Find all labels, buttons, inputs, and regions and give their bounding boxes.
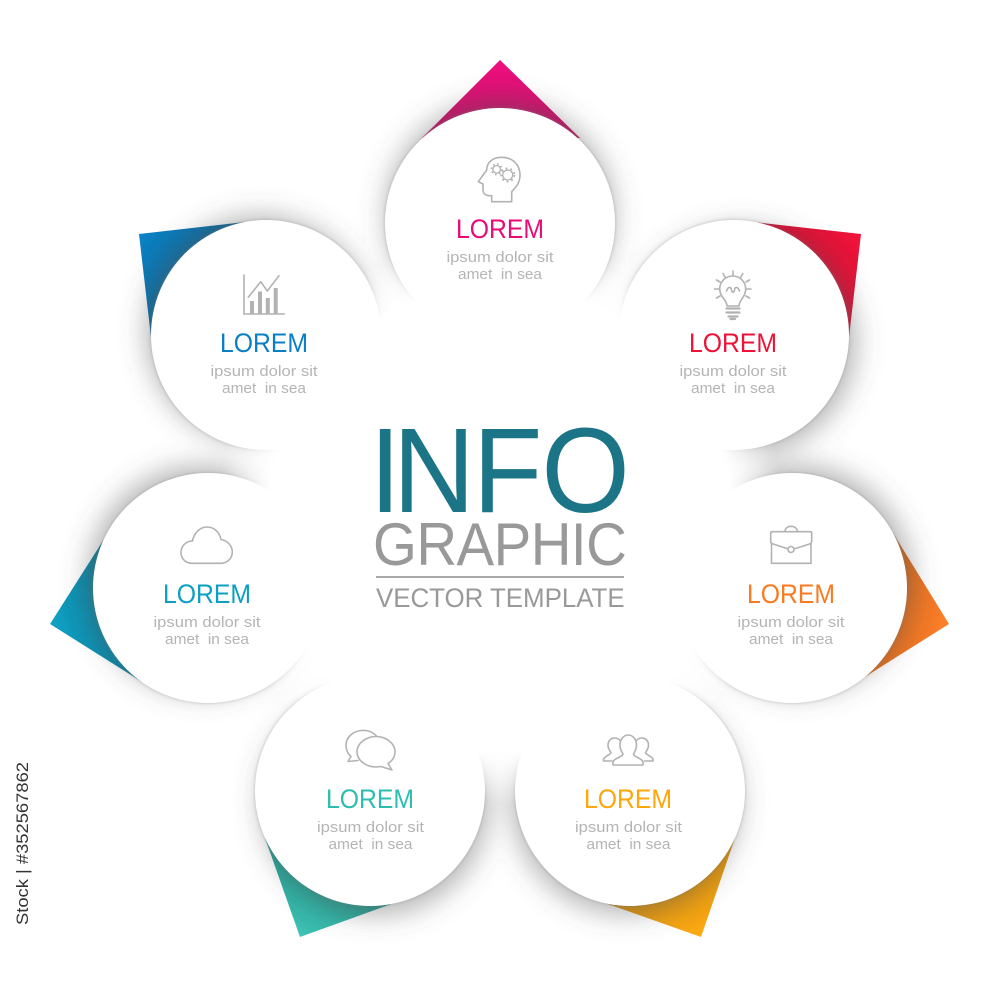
description: ipsum dolor sit [446, 249, 554, 266]
panel: upper right step [680, 271, 787, 397]
title rule [376, 576, 624, 578]
white circles [93, 108, 907, 906]
heading: LOREM [326, 784, 414, 814]
description: ipsum dolor sit [317, 819, 425, 836]
title [369, 403, 630, 613]
description: amet in sea [328, 836, 413, 853]
description: amet in sea [165, 631, 250, 648]
description: amet in sea [749, 631, 834, 648]
icon: group of people [604, 735, 653, 765]
panel: lower right step [575, 735, 683, 853]
icon: head with gears [478, 157, 520, 202]
description: ipsum dolor sit [680, 363, 787, 380]
heading: LOREM [456, 214, 544, 244]
description: amet in sea [458, 266, 543, 283]
icon: cloud [181, 527, 232, 563]
icon: speech bubbles [346, 730, 395, 770]
icon: briefcase [771, 526, 812, 563]
heading: LOREM [747, 579, 835, 609]
heading: LOREM [163, 579, 251, 609]
description: ipsum dolor sit [154, 614, 261, 631]
heading: LOREM [584, 784, 672, 814]
coloured ribbon corners behind the circles [50, 60, 949, 937]
description: ipsum dolor sit [210, 363, 318, 380]
icon: light bulb [714, 271, 751, 319]
white central area merging the circles [268, 288, 732, 752]
description: amet in sea [586, 836, 671, 853]
stock number, rotated along the left edge: Stock | #352567862 [13, 762, 32, 925]
heading: LOREM [220, 328, 308, 358]
soft drop shadows of the circles [87, 100, 913, 916]
title line: INFO: INFO [369, 403, 630, 538]
description: amet in sea [222, 380, 307, 397]
panel: right step [738, 526, 845, 648]
panel: left step [154, 527, 261, 648]
heading: LOREM [689, 328, 777, 358]
title line: VECTOR TEMPLATE: VECTOR TEMPLATE [376, 583, 625, 613]
description: ipsum dolor sit [738, 614, 845, 631]
icon: bar chart with trend line [244, 275, 284, 314]
panel: lower left step [317, 730, 425, 853]
panel: upper left step [210, 275, 318, 397]
title line: GRAPHIC: GRAPHIC [373, 511, 627, 578]
description: ipsum dolor sit [575, 819, 683, 836]
panel: top step [446, 157, 554, 283]
description: amet in sea [691, 380, 776, 397]
